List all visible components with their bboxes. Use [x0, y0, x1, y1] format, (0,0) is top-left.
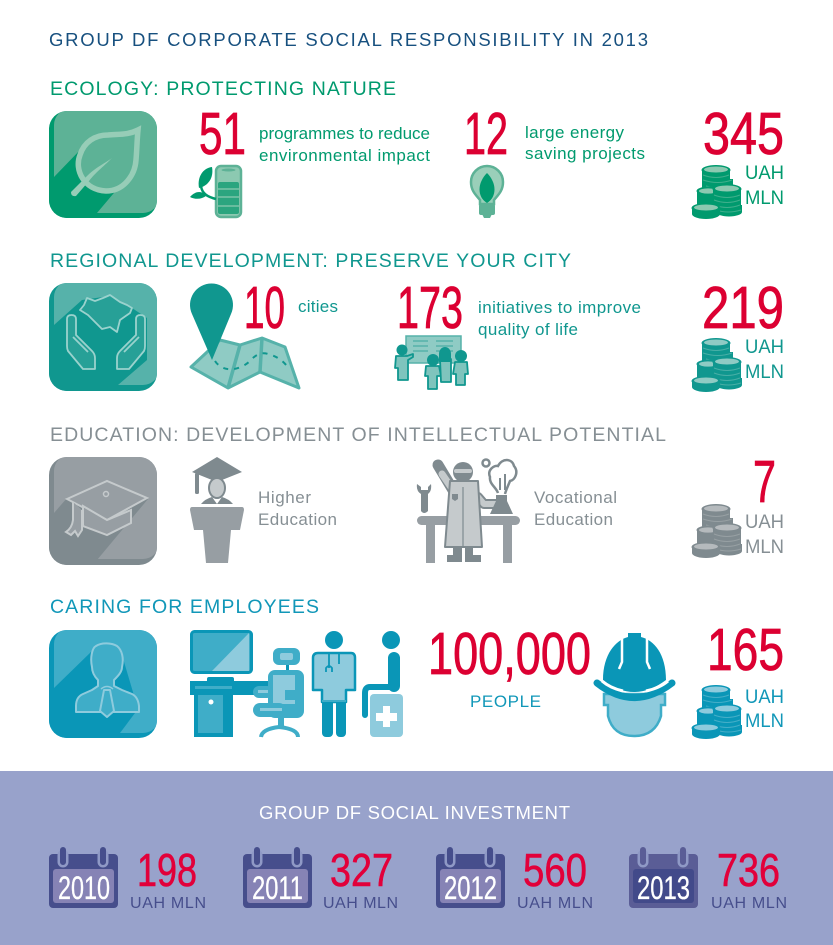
icon: employee badge — [49, 628, 159, 738]
panel: ecology — [49, 78, 784, 219]
number: 219: 219 — [702, 275, 784, 341]
item: 2011 — [243, 844, 398, 912]
heading: employees: CARING FOR EMPLOYEES — [50, 596, 319, 618]
icon: light bulb — [471, 166, 503, 218]
icon: map with pin — [190, 283, 299, 388]
heading: regional development: REGIONAL DEVELOPMENT: PRESERVE YOUR CITY — [50, 250, 571, 272]
number: 165: 165 — [707, 617, 784, 683]
item: 2012: 560 — [523, 844, 587, 896]
text: people: PEOPLE — [470, 692, 541, 711]
item: 2011: UAH MLN — [323, 895, 398, 912]
label: MLN: MLN — [745, 187, 784, 209]
title: GROUP DF CORPORATE SOCIAL RESPONSIBILITY IN 2013 — [49, 29, 648, 50]
label: UAH: UAH — [745, 511, 784, 533]
label: UAH: UAH — [745, 336, 784, 358]
text: higher: Higher — [258, 488, 311, 507]
item: 2011: 2011 — [252, 870, 303, 906]
icon: leaf badge — [49, 109, 159, 218]
item: 2010: 2010 — [58, 870, 110, 906]
icon: doctor — [313, 631, 355, 737]
number: 345: 345 — [703, 101, 784, 167]
label: UAH: UAH — [745, 162, 784, 184]
item: 2013: 2013 — [637, 870, 690, 906]
icon: group at presentation board — [395, 336, 468, 389]
item: 2012 — [436, 844, 593, 912]
icon: seated person with medical case — [365, 631, 403, 737]
heading: social investment: GROUP DF SOCIAL INVESTMENT — [259, 802, 570, 823]
label: MLN: MLN — [745, 536, 784, 558]
item: 2013: 736 — [717, 844, 780, 896]
icon: hands with map badge — [49, 281, 159, 391]
panel: education — [49, 424, 784, 565]
panel: caring for employees — [49, 596, 784, 739]
item: 2010 — [49, 844, 206, 912]
icon: speaker at podium — [190, 457, 244, 563]
icon: graduation cap badge — [49, 455, 159, 565]
label: UAH: UAH — [745, 686, 784, 708]
label: MLN: MLN — [745, 361, 784, 383]
label: MLN: MLN — [745, 710, 784, 732]
text: quality of life: quality of life — [478, 320, 578, 339]
text: environmental impact: environmental impact — [259, 146, 430, 165]
text: programmes: programmes to reduce — [259, 124, 430, 143]
heading: education: EDUCATION: DEVELOPMENT OF INTELLECTUAL POTENTIAL — [50, 424, 666, 446]
text: cities: cities — [298, 297, 338, 316]
icon: coins — [692, 685, 742, 739]
text: vocational: Vocational — [534, 488, 617, 507]
icon: coins — [692, 504, 742, 558]
item: 2010: 198 — [137, 844, 197, 896]
item: 2011: 327 — [330, 844, 393, 896]
item: 2012: UAH MLN — [517, 895, 593, 912]
number: 51: 51 — [199, 101, 246, 167]
item: 2010: UAH MLN — [130, 895, 206, 912]
icon: coins — [692, 338, 742, 392]
icon: coins — [692, 165, 742, 219]
icon: battery with leaves — [190, 166, 241, 217]
icon: scientist at bench — [417, 460, 520, 563]
item: 2013 — [629, 844, 787, 912]
number: 173: 173 — [397, 275, 463, 341]
icon: office desk and chair — [190, 632, 304, 737]
text: education: Education — [534, 510, 613, 529]
text: saving projects: saving projects — [525, 144, 645, 163]
text: initiatives: initiatives to improve — [478, 298, 641, 317]
item: 2013: UAH MLN — [711, 895, 787, 912]
number: 7: 7 — [753, 449, 776, 515]
number: 10: 10 — [244, 275, 285, 341]
number: 12: 12 — [464, 101, 508, 167]
icon: hard hat — [597, 633, 672, 736]
panel: regional development — [49, 250, 784, 392]
text: large energy: large energy — [525, 123, 624, 142]
item: 2012: 2012 — [444, 870, 497, 906]
heading: ecology: ECOLOGY: PROTECTING NATURE — [50, 78, 396, 100]
number: 100,000: 100,000 — [428, 621, 591, 687]
panel: social investment band — [0, 771, 833, 945]
text: education: Education — [258, 510, 337, 529]
